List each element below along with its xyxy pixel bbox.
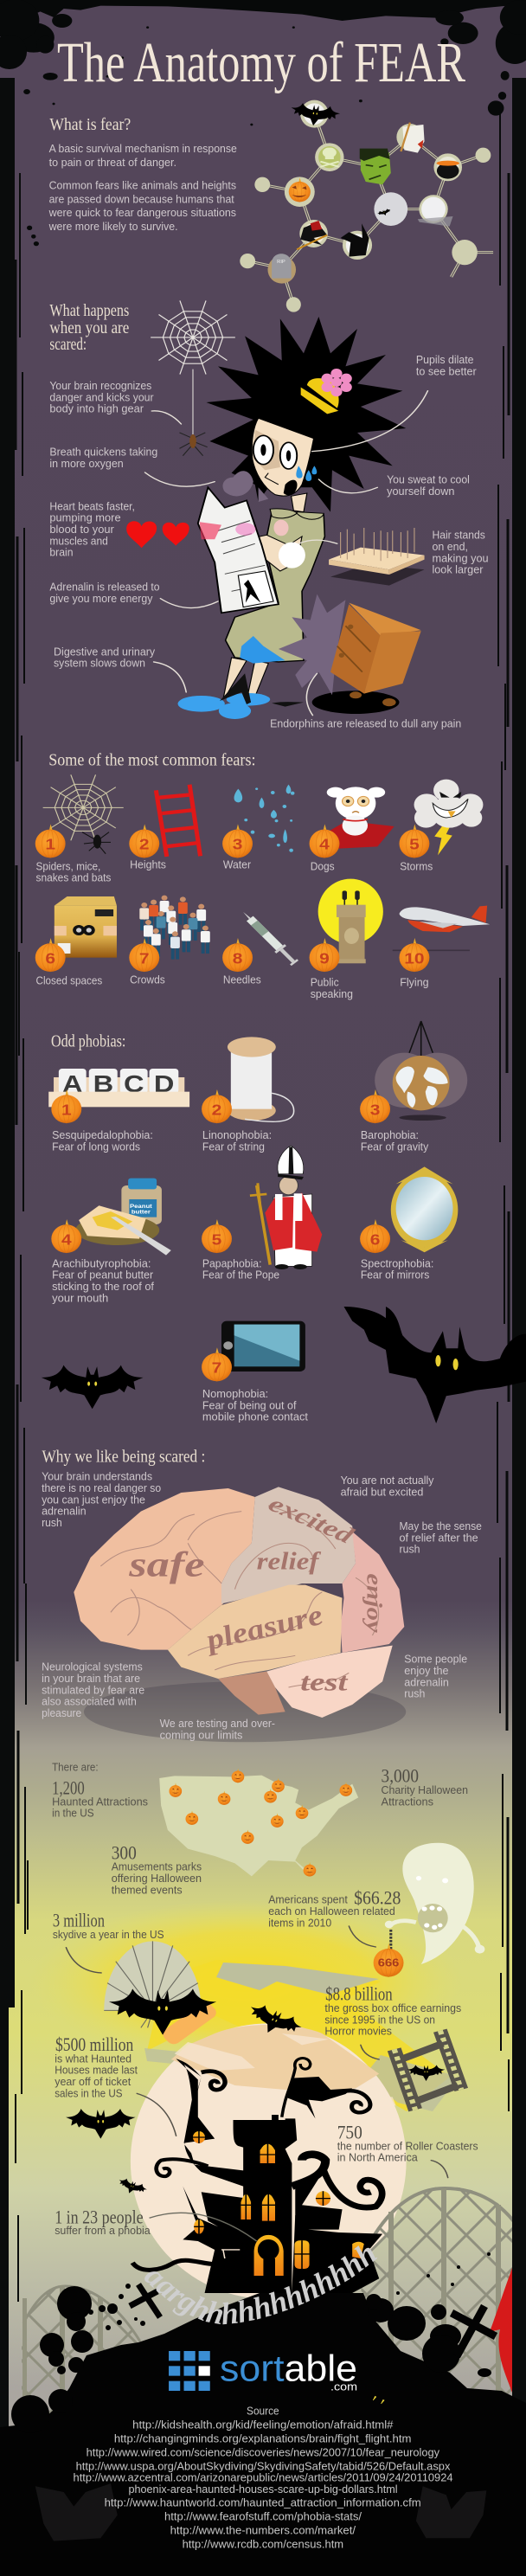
illustration: haunted house [132,2059,382,2293]
top grunge [0,0,526,246]
heading: odd phobias: Odd phobias: [51,1031,125,1050]
text: sources: http://changingminds.org/explanations/brain/fight_flight.htm [114,2431,411,2444]
panel: statistics lower [55,1941,478,2293]
stat: $500 million: sales in the US [55,2086,123,2099]
phobia 1: long words: B [93,1071,113,1097]
text: testing limits [160,1717,275,1741]
phobia 4: peanut butter [51,1179,171,1304]
text: brain understands: you can just enjoy the [42,1493,145,1506]
fear 10: flying [393,906,490,988]
phobia 3: gravity: 3 [370,1102,381,1119]
text: digestive: Digestive and urinary [54,645,156,658]
logo: sortable [169,2348,357,2393]
fear 9: public speaking: 9 [319,950,330,967]
illustration: brain: safe [128,1545,205,1584]
text: hair: look larger [432,563,484,575]
fear 7: crowds: Crowds [130,973,165,986]
text: breath [49,446,157,470]
roller coaster right [359,2187,526,2423]
phobia 5: pope: Papaphobia: [202,1256,261,1269]
fear 5: storms: 5 [409,836,420,853]
stat: 750: 750 [337,2122,362,2143]
text block: definition: A basic survival mechanism in response [49,142,237,155]
text block: definition [48,142,237,233]
panel: odd phobias [42,1021,526,1423]
yellow moon glow and clouds [30,1899,463,2111]
fear 3: water: Water [223,858,251,870]
phobia 3: gravity [360,1021,467,1153]
text: relief [399,1519,482,1555]
stat: 1,200: There are: [52,1761,99,1773]
text: heart: brain [49,546,74,558]
text: sources: http://www.wired.com/science/discoveries/news/2007/10/fear_neurology [87,2445,440,2458]
stat: 1,200: Haunted Attractions [52,1795,148,1808]
panel: footer [35,2348,486,2550]
panel: statistics upper [52,1761,484,2005]
phobia 1: long words: Fear of long words [52,1140,140,1153]
phobia 5: pope: 5 [212,1231,221,1249]
text: brain: Your brain recognizes [49,379,151,392]
text: pupils: to see better [416,364,477,377]
fear 5: storms [399,780,483,872]
text: neurological [42,1661,144,1719]
phobia 5: pope [202,1146,322,1281]
logo: sortable: sortable [220,2348,357,2389]
stat: box office [324,2001,461,2059]
icon: bedside cabinet [279,594,421,714]
phobia 1: long words: A [62,1071,83,1097]
chart: fear molecule: RIP [277,260,285,265]
text: hair: making you [432,551,489,564]
text: aarghhh scream: aarghhhhhhhhhhhh [144,2245,377,2324]
stat: 300: themed events [112,1883,183,1896]
stat: $66.28: items in 2010 [268,1916,331,1929]
text: brain understands: there is no real danger so [42,1481,161,1494]
fear 6: closed spaces: 6 [45,950,55,967]
stat: 3,000: Charity Halloween [382,1783,468,1796]
text: digestive [54,645,156,669]
stat: 3,000 [382,1765,468,1808]
fear 5: storms: Storms [400,860,433,872]
stat: $500 million [55,2034,176,2136]
phobia 7: mobile phone: 7 [212,1359,221,1377]
stat: 3 million [53,1910,164,1973]
text: heart: pumping more [49,511,121,524]
phobia 2: string: Linonophobia: [202,1128,272,1141]
fear 4: dogs: 4 [319,836,330,853]
heading: what happens: scared: [49,334,87,354]
stat: $66.28: each on Halloween related [268,1905,395,1918]
text: brain: danger and kicks your [49,390,154,403]
icon: spider web and spider [151,300,235,456]
illustration: brain: enjoy [362,1573,386,1633]
stat: box office: Horror movies [324,2025,392,2037]
text: breath: Breath quickens taking [49,446,157,458]
blood streak [490,2258,519,2393]
text: enjoy: Some people [404,1653,467,1665]
stat: 1,200 [52,1761,148,1819]
fear 7: crowds: 7 [139,950,150,967]
stat: $500 million: $500 million [55,2034,133,2056]
text: brain understands [42,1470,161,1529]
stat: $8.8 billion heading: $8.8 billion [325,1983,393,2005]
icon: small bats [66,2001,305,2198]
text: enjoy: adrenalin [404,1675,449,1688]
text: enjoy: enjoy the [404,1664,449,1677]
text: sweat: You sweat to cool [387,473,470,485]
text: neurological: stimulated by fear are [42,1683,144,1696]
fear 1: spiders [35,774,124,883]
stat: 3,000: 3,000 [382,1765,419,1787]
phobia 6: mirrors: Fear of mirrors [361,1269,429,1281]
fear 10: flying: Flying [400,976,429,988]
text: relief: of relief after the [399,1531,478,1544]
icon: big bat [343,1307,526,1423]
text: testing limits: coming our limits [160,1728,242,1741]
text: testing limits: We are testing and over- [160,1717,275,1730]
moon [131,2023,407,2299]
chart: fear molecule [240,100,493,312]
stat: 3 million: 3 million [53,1910,105,1931]
text block: definition: to pain or threat of danger. [49,156,176,169]
panel: what is fear [48,100,493,312]
stat: $66.28: Americans spent [268,1893,348,1905]
text: pupils: Pupils dilate [416,353,474,366]
icon: yellow eyes [373,2396,384,2404]
fear 6: closed spaces: Closed spaces [35,973,102,986]
text: sources: http://www.uspa.org/AboutSkydiving/SkydivingSafety/tabid/526/Default.aspx [76,2459,450,2472]
phobia 4: peanut butter: butter [132,1208,151,1215]
phobia 2: string: Fear of string [202,1140,265,1153]
phobia 1: long words [48,1069,189,1153]
text: sources [74,2405,453,2550]
fear 8: needles: Needles [223,973,261,986]
logo: sortable: .com [330,2380,357,2393]
phobia 4: peanut butter: Fear of peanut butter [52,1269,153,1281]
text: hair: Hair stands [432,529,485,541]
text: heart: blood to your [49,523,114,536]
fear 2: heights: 2 [139,836,150,853]
phobia 1: long words: D [154,1071,174,1097]
text: enjoy [404,1653,467,1699]
text: sources: http://www.fearofstuff.com/phobia-stats/ [164,2510,362,2522]
text: pupils [416,353,477,377]
text: neurological: pleasure [42,1706,81,1719]
stat: 3,000: Attractions [382,1795,433,1808]
text: brain [49,379,154,414]
icon: pin board [329,528,425,586]
phobia 6: mirrors [360,1166,458,1281]
fear 7: crowds [129,896,210,986]
phobia 2: string: 2 [212,1102,221,1119]
text block: definition: were quick to fear dangerous situations [48,206,236,219]
heading: common fears: Some of the most common fears: [48,750,256,769]
phobia 7: mobile phone: Fear of being out of [202,1398,296,1411]
fear 9: public speaking: speaking [311,987,353,1000]
heading: what happens [49,300,129,354]
text: digestive: system slows down [54,657,145,669]
text: adrenalin: give you more energy [49,592,153,605]
fear 1: spiders: snakes and bats [35,871,111,883]
fear 9: public speaking [310,879,383,1000]
icon: bat with parachute [104,1941,219,2046]
text: neurological: Neurological systems [42,1661,143,1673]
text: hair: on end, [432,540,468,553]
fear 3: water: 3 [233,836,243,853]
stat: 300 [112,1842,202,1896]
fear 4: dogs [310,787,394,872]
faint evil faces [35,2483,486,2541]
text: sources: http://www.azcentral.com/arizonarepublic/news/articles/2011/09/24/20110924 [74,2470,453,2483]
text: endorphins: Endorphins are released to dull any pain [270,717,461,729]
text: brain understands: Your brain understands [42,1470,152,1482]
footer black ground [0,2293,526,2576]
heading: why we like being scared: Why we like being scared : [42,1447,205,1466]
text: hair [432,529,489,575]
fear 9: public speaking: Public [311,976,339,988]
illustration: brain: relief [257,1547,322,1575]
phobia 1: long words: 1 [61,1102,72,1119]
phobia 4: peanut butter: Arachibutyrophobia: [52,1256,151,1269]
text block: definition: were more likely to survive. [48,220,178,233]
text: relief: rush [399,1543,420,1555]
stat: $66.28 [268,1887,401,1947]
text: enjoy: rush [404,1687,425,1699]
text: sweat [387,473,470,498]
fear 1: spiders: 1 [45,836,55,853]
text: sources: http://www.hauntworld.com/haunted_attraction_information.cfm [105,2496,421,2509]
stat: 1,200: in the US [52,1807,94,1819]
stat: 750: the number of Roller Coasters [337,2139,478,2152]
stat: 750: in North America [337,2151,418,2163]
illustration: brain: excited [264,1491,358,1549]
fear 4: dogs: Dogs [311,860,335,872]
text: sweat: yourself down [387,485,454,498]
text: sources: http://www.the-numbers.com/market/ [170,2524,356,2536]
fear 6: closed spaces [35,896,117,986]
illustration: brain [74,1487,406,1742]
phobia 4: peanut butter: 4 [61,1231,72,1249]
stat: 300: Amusements parks [112,1860,202,1873]
icon: hearts [126,521,189,548]
text: heart: muscles and [49,534,108,547]
text: brain: body into high gear [49,402,144,414]
heading: what happens: What happens [49,300,129,320]
phobia 7: mobile phone [202,1321,308,1423]
text: neurological: also associated with [42,1695,137,1707]
fear 8: needles: 8 [233,950,243,967]
text: sources: http://kidshealth.org/kid/feeling/emotion/afraid.html# [132,2419,394,2431]
illustration: brain: pleasure [199,1599,327,1656]
phobia 7: mobile phone: Nomophobia: [202,1387,268,1400]
phobia 1: long words: Sesquipedalophobia: [52,1128,153,1141]
phobia 3: gravity: Barophobia: [361,1128,419,1141]
icon: film strip [394,2031,461,2110]
phobia 2: string [202,1037,294,1153]
text: sources: Source [247,2405,279,2417]
panel: what happens when you are scared [49,300,489,729]
stat: box office: the gross box office earnings [324,2001,461,2014]
connector lines [145,391,427,716]
phobia 6: mirrors: Spectrophobia: [361,1256,433,1269]
map: USA with pumpkins [159,1769,358,1877]
stat: box office: since 1995 in the US on [324,2013,435,2026]
text: not afraid: afraid but excited [341,1485,423,1498]
stat: $500 million: is what Haunted [55,2052,132,2065]
illustration: ghost holding 666 pumpkin [374,1843,484,1977]
text: not afraid [341,1474,434,1498]
text: heart: Heart beats faster, [49,499,135,512]
text: relief: May be the sense [399,1519,482,1532]
stat: 750 [337,2122,478,2178]
stat: $66.28: $66.28 [354,1887,401,1909]
text: not afraid: You are not actually [341,1474,434,1487]
fear 10: flying: 10 [404,950,425,967]
illustration: ghost holding 666 pumpkin: 666 [378,1957,400,1969]
phobia 4: peanut butter: sticking to the roof of [52,1280,154,1293]
stat: $500 million: Houses made last [55,2064,138,2076]
phobia 1: long words: C [124,1071,144,1097]
roller coaster left [22,2285,143,2423]
text: sources: http://www.rcdb.com/census.htm [183,2538,343,2550]
text: brain understands: rush [42,1516,62,1529]
icon: small bat [42,1365,144,1409]
phobia 7: mobile phone: mobile phone contact [202,1410,308,1423]
stat: 1 in 23: 1 in 23 people [55,2207,144,2228]
fear 8: needles [222,909,300,986]
stat: 300: offering Halloween [112,1872,202,1885]
text: adrenalin [49,581,160,605]
phobia 6: mirrors: 6 [370,1231,381,1249]
panel: most common fears [35,750,490,1000]
phobia 3: gravity: Fear of gravity [361,1140,429,1153]
fear 1: spiders: Spiders, mice, [35,859,100,872]
phobia 4: peanut butter: your mouth [52,1291,108,1304]
text: heart [49,499,135,558]
ink splats and crosses [11,2252,496,2433]
phobia 4: peanut butter: Peanut [130,1203,152,1210]
illustration: frightened woman [178,317,406,719]
fear 3: water [222,785,294,870]
text: sources: phoenix-area-haunted-houses-scare-up-big-dollars.html [129,2483,398,2496]
stat: 1 in 23: suffer from a phobia [55,2224,151,2237]
panel: why we like being scared [42,1447,482,1742]
heading: what happens: when you are [49,318,129,337]
text: neurological: in your brain that are [42,1672,140,1685]
fear 2: heights: Heights [130,858,166,870]
illustration: brain: test [300,1667,349,1696]
text block: definition: Common fears like animals and heights [49,178,236,191]
text block: definition: are passed down because humans that [49,192,234,205]
text: adrenalin: Adrenalin is released to [49,581,160,593]
stat: 3 million: skydive a year in the US [53,1928,164,1941]
heading: what is fear: What is fear? [49,114,131,134]
stat: $500 million: year off of ticket [55,2075,131,2088]
text: brain understands: adrenalin [42,1505,87,1517]
text: breath: in more oxygen [49,457,124,470]
fear 2: heights [129,785,201,870]
stat: 1,200: 1,200 [52,1777,85,1799]
phobia 5: pope: Fear of the Pope [202,1269,279,1281]
stat: 300: 300 [112,1842,137,1864]
stat: 1 in 23 [55,2207,257,2241]
